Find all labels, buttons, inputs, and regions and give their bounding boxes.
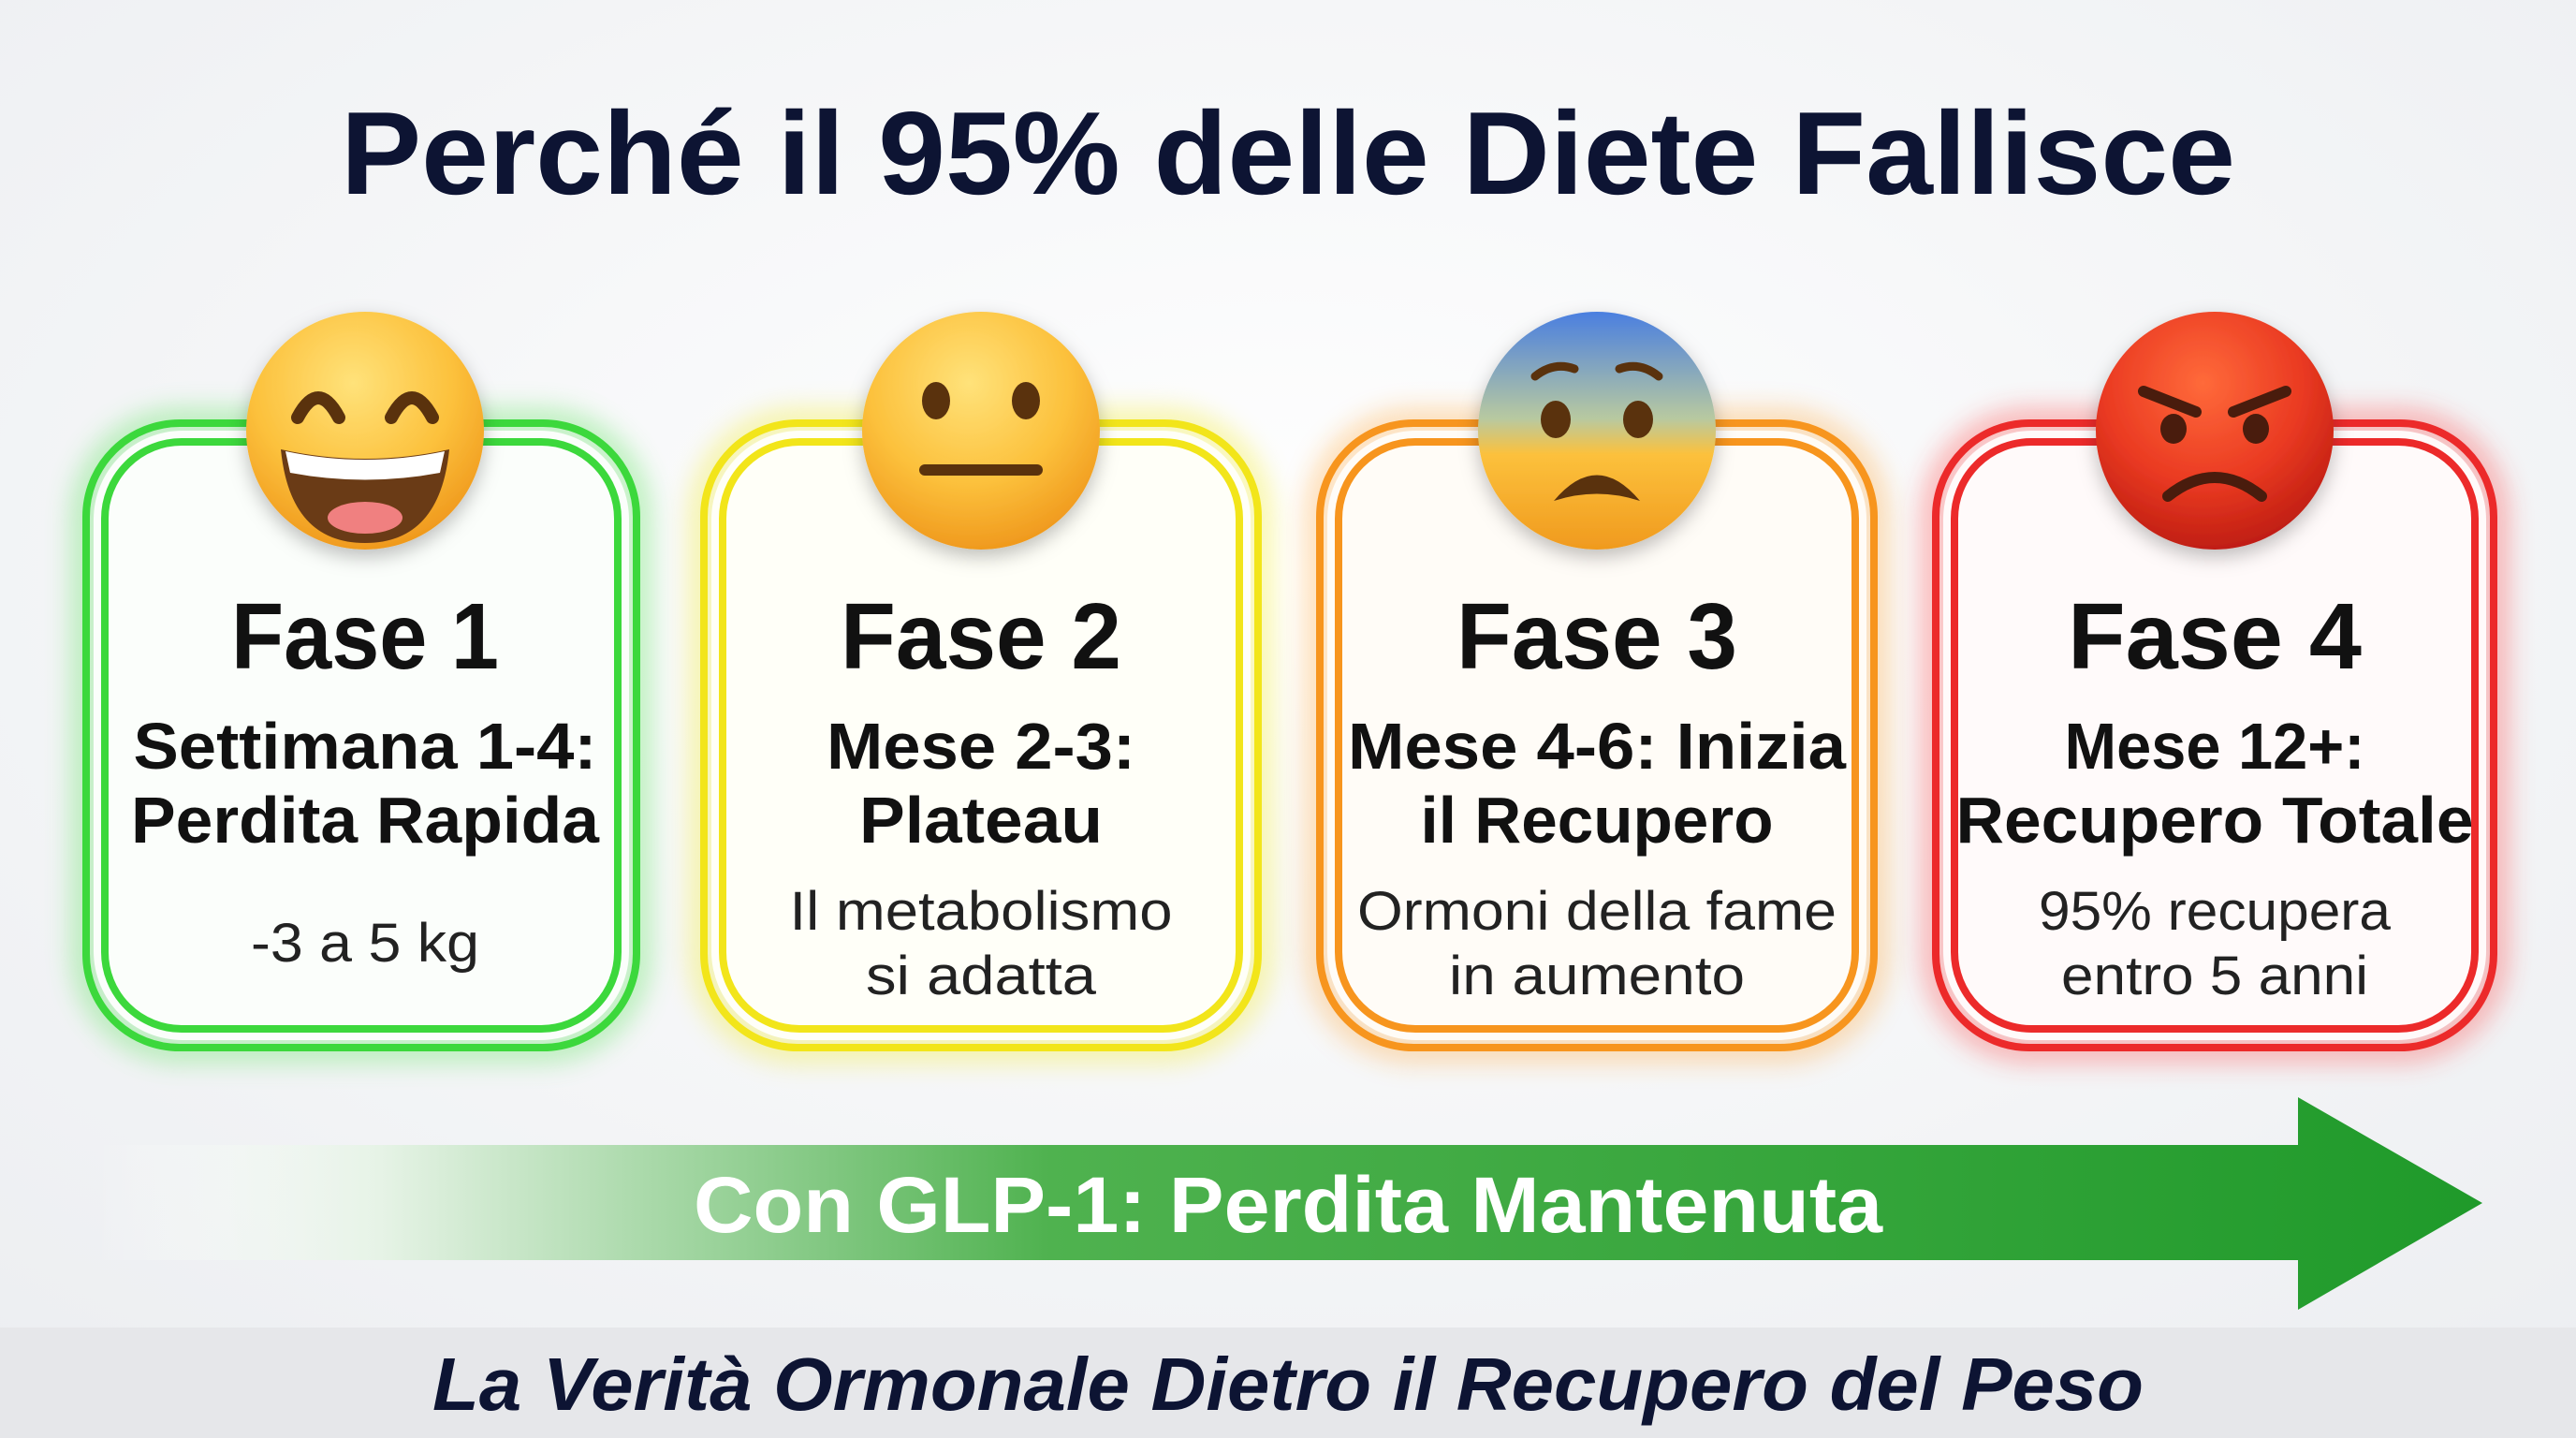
panel: fase 1: Perdita Rapida — [131, 784, 600, 857]
arrow label: Con GLP-1: Perdita Mantenuta — [694, 1161, 1883, 1249]
icon: anxious emoji — [1478, 312, 1716, 550]
panel: fase 2: si adatta — [866, 946, 1097, 1006]
panel: fase 3: il Recupero — [1421, 784, 1773, 857]
panel: fase 3: in aumento — [1449, 946, 1745, 1006]
panel: fase 2: Il metabolismo — [790, 881, 1172, 942]
panel: fase 3: Ormoni della fame — [1357, 881, 1837, 942]
icon: neutral emoji — [862, 312, 1100, 550]
text block: Mese 12+: — [2065, 710, 2364, 783]
panel: fase 2: Plateau — [859, 784, 1103, 857]
text block: Settimana 1-4: — [133, 710, 597, 783]
panel: fase 4: entro 5 anni — [2061, 946, 2368, 1006]
subtitle: La Verità Ormonale Dietro il Recupero del Peso — [432, 1343, 2144, 1426]
heading: Fase 4 — [2068, 584, 2362, 689]
panel: fase 4: Recupero Totale — [1956, 784, 2473, 857]
panel: fase 1: -3 a 5 kg — [251, 913, 479, 974]
footer band — [0, 1328, 2576, 1438]
icon: angry emoji — [2096, 312, 2334, 550]
icon: grinning emoji — [246, 312, 484, 550]
heading: Fase 2 — [841, 584, 1121, 689]
panel: fase 3 — [1320, 312, 1874, 1048]
panel: fase 2 — [704, 312, 1258, 1048]
heading: Fase 3 — [1456, 584, 1737, 689]
arrow — [94, 1097, 2482, 1310]
text block: Mese 4-6: Inizia — [1348, 710, 1847, 783]
panel: fase 4 — [1936, 312, 2494, 1048]
heading: Fase 1 — [231, 584, 499, 689]
title: Perché il 95% delle Diete Fallisce — [341, 87, 2235, 219]
text block: Mese 2-3: — [827, 710, 1135, 783]
panel: fase 1 — [86, 312, 637, 1048]
panel: fase 4: 95% recupera — [2039, 881, 2392, 942]
